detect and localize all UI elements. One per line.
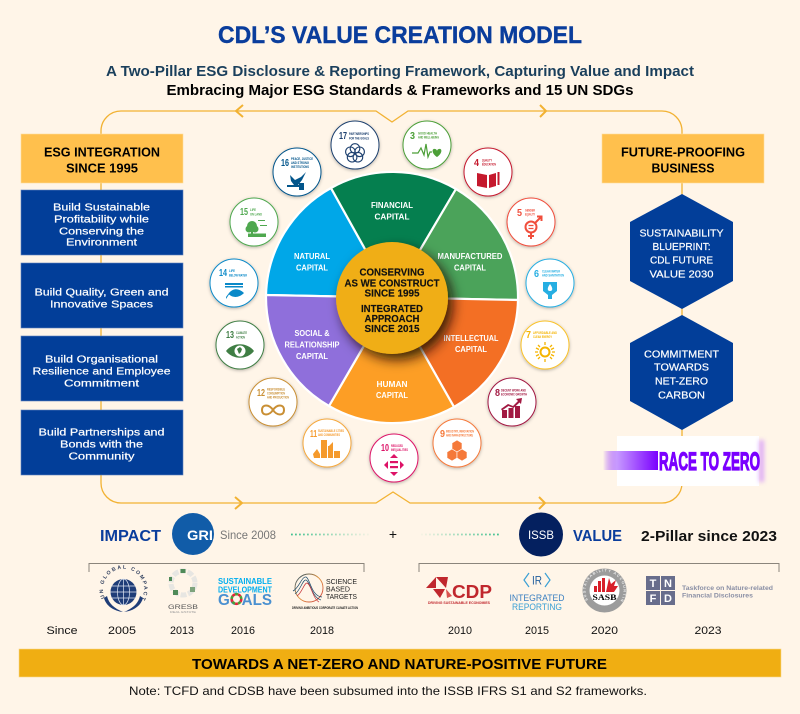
SDG 8: DECENT WORK AND: [501, 388, 526, 392]
box: sustainable profitability: Build Sustainable: [53, 202, 150, 214]
logo: Integrated Reporting: REPORTING: [512, 602, 562, 613]
hexagon: sustainability blueprint: VALUE 2030: [650, 268, 714, 280]
pie labels: CAPITAL: [454, 262, 486, 272]
logo: GRESB: GRESB: [168, 604, 198, 611]
box: sustainable profitability: [21, 190, 183, 255]
logo: Sustainable Development Goals: SUSTAINABLE: [218, 576, 272, 586]
two-pillar label: 2-Pillar since 2023: [641, 529, 777, 545]
logo: Sustainable Development Goals: DEVELOPMENT: [218, 584, 273, 594]
GRI badge: [172, 513, 214, 555]
box: partnerships: Build Partnerships and: [38, 426, 165, 438]
pie labels: FINANCIAL: [371, 200, 413, 210]
adoption years: 2013: [170, 625, 194, 637]
SDG 7: 7: [526, 330, 531, 341]
centre disc: CONSERVING: [360, 268, 425, 278]
pie labels: HUMAN: [376, 379, 408, 389]
plus sign: +: [389, 526, 397, 542]
adoption years: 2018: [310, 625, 334, 637]
SDG 14: [210, 259, 258, 307]
SDG 15: [230, 198, 278, 246]
SDG 15: ON LAND: [250, 212, 262, 216]
SDG 13: [216, 321, 264, 369]
logo: TNFD: D: [664, 593, 672, 605]
SDG 16: AND STRONG: [291, 161, 309, 165]
SDG 12: [249, 378, 297, 426]
centre disc: APPROACH: [364, 314, 420, 325]
SDG 10: REDUCED: [391, 444, 403, 448]
box: organisational resilience: Commitment: [64, 378, 139, 390]
SDG 10: 10: [381, 443, 389, 454]
heading: ESG integration: ESG INTEGRATION: [44, 146, 160, 160]
logo: CDP: DRIVING SUSTAINABLE ECONOMIES: [428, 601, 491, 605]
SDG 17: [331, 121, 379, 169]
SDG 3: [403, 121, 451, 169]
SDG 14: LIFE: [229, 269, 236, 273]
SDG 17: FOR THE GOALS: [349, 136, 370, 140]
adoption years: 2020: [591, 625, 618, 637]
SDG 12: AND PRODUCTION: [267, 396, 289, 400]
pie labels: [284, 200, 502, 400]
box: sustainable profitability: Conserving the: [59, 226, 144, 238]
pie labels: MANUFACTURED: [438, 251, 502, 261]
SDG 3: GOOD HEALTH: [418, 132, 437, 136]
logo: SASB: [582, 568, 626, 612]
hexagon: sustainability blueprint: SUSTAINABILITY: [640, 228, 724, 240]
SDG 15: LIFE: [250, 208, 257, 212]
SDG 9: [433, 419, 481, 467]
pie labels: CAPITAL: [374, 212, 410, 222]
subtitle: A Two-Pillar ESG Disclosure & Reporting Framework, Capturing Value and Impact: [106, 63, 694, 80]
SDG 8: [488, 378, 536, 426]
centre disc: [336, 242, 448, 354]
SDG 3: AND WELL-BEING: [418, 136, 439, 140]
box: organisational resilience: [21, 336, 183, 401]
GRI badge: GRI: [187, 527, 213, 543]
logo: Science Based Targets: [292, 574, 358, 610]
dotted connector right: [421, 534, 500, 536]
SDG 6: [526, 259, 574, 307]
box: quality spaces: [21, 263, 183, 328]
hexagon: net-zero commitment: [630, 315, 733, 430]
logo: Integrated Reporting: [510, 573, 565, 613]
centre disc: INTEGRATED: [361, 304, 423, 315]
SDG 9: 9: [440, 429, 445, 440]
SDG 4: 4: [474, 158, 479, 169]
logo: Sustainable Development Goals: [218, 576, 273, 609]
logo: GRESB: [168, 569, 198, 614]
SDG 11: SUSTAINABLE CITIES: [318, 429, 345, 433]
hexagon: net-zero commitment: CARBON: [658, 390, 705, 402]
SDG 11: AND COMMUNITIES: [318, 433, 340, 437]
logo: CDP: CDP: [452, 582, 492, 602]
SDG 7: AFFORDABLE AND: [533, 331, 557, 335]
panel: ESG integration: [21, 134, 183, 475]
SDG 5: GENDER: [525, 208, 535, 212]
adoption years: 2023: [694, 625, 722, 637]
SDG 7: [521, 321, 569, 369]
heading: ESG integration: [21, 134, 183, 183]
centre disc: AS WE CONSTRUCT: [344, 278, 440, 290]
logo: Sustainable Development Goals: GOALS: [218, 592, 272, 609]
since 2008: Since 2008: [220, 528, 276, 542]
heading: future-proofing: FUTURE-PROOFING: [621, 146, 745, 160]
SDG 17: 17: [339, 131, 347, 142]
logo: Science Based Targets: BASED: [326, 584, 350, 594]
connecting frame with arrows: [101, 105, 682, 509]
pie chart: six capitals: [266, 172, 518, 423]
SDG 8: 8: [495, 388, 500, 399]
logo: GRESB: REAL ESTATE: [170, 610, 196, 614]
impact bracket: [89, 564, 364, 572]
SDG 10: [370, 434, 418, 482]
impact label: IMPACT: [100, 528, 162, 545]
value label: VALUE: [573, 528, 622, 545]
logo: TNFD: T: [650, 578, 657, 590]
adoption years: 2016: [231, 625, 255, 637]
box: organisational resilience: Resilience and Employee: [32, 366, 171, 378]
pie labels: SOCIAL &: [294, 328, 330, 338]
heading: ESG integration: SINCE 1995: [66, 162, 138, 176]
logo: TNFD: F: [650, 593, 657, 605]
adoption years: [46, 625, 722, 637]
box: organisational resilience: Build Organisational: [45, 354, 158, 366]
SDG 16: 16: [281, 158, 289, 169]
adoption years: 2010: [448, 625, 472, 637]
logo: TNFD: Financial Disclosures: [682, 592, 754, 600]
hexagon: sustainability blueprint: BLUEPRINT:: [652, 241, 710, 253]
logo: TNFD: N: [664, 578, 672, 590]
SDG 17: PARTNERSHIPS: [349, 132, 370, 136]
dotted connector left: [291, 534, 370, 536]
pie labels: INTELLECTUAL: [444, 333, 498, 343]
SDG 5: 5: [517, 208, 522, 219]
SDG 14: 14: [219, 268, 227, 279]
adoption years: 2015: [525, 625, 549, 637]
SDG 7: CLEAN ENERGY: [533, 335, 553, 339]
logo: race to zero: [603, 436, 764, 486]
SDG 16: [273, 148, 321, 196]
SDG 16: PEACE, JUSTICE: [291, 157, 314, 161]
ISSB badge: [519, 512, 563, 556]
footnote: Note: TCFD and CDSB have been subsumed into the ISSB IFRS S1 and S2 frameworks.: [129, 684, 647, 698]
SDG 5: [507, 198, 555, 246]
heading: future-proofing: BUSINESS: [652, 162, 714, 176]
SDG 11: [303, 419, 351, 467]
logo: Integrated Reporting: INTEGRATED: [510, 593, 565, 604]
centre disc: SINCE 1995: [364, 288, 420, 300]
SDG 3: 3: [410, 131, 415, 142]
box: sustainable profitability: Environment: [66, 236, 137, 248]
SDG 15: 15: [240, 207, 248, 218]
pie labels: RELATIONSHIP: [284, 340, 340, 350]
SDG 6: 6: [534, 269, 539, 280]
panel: future-proofing business: [602, 134, 764, 486]
hexagon: sustainability blueprint: [630, 194, 733, 309]
box: sustainable profitability: Profitability while: [54, 214, 149, 226]
SDG 8: ECONOMIC GROWTH: [501, 392, 527, 396]
box: quality spaces: Build Quality, Green and: [34, 286, 169, 298]
hexagon: net-zero commitment: NET-ZERO: [655, 376, 708, 388]
SDG 6: CLEAN WATER: [542, 270, 560, 274]
SDG 4: QUALITY: [482, 158, 492, 162]
SDG 4: EDUCATION: [482, 162, 496, 166]
logo: TNFD: Taskforce on Nature-related: [682, 585, 773, 592]
SDG 13: 13: [226, 330, 234, 341]
logo: Science Based Targets: SCIENCE: [326, 577, 357, 586]
SDG 12: 12: [257, 388, 265, 399]
pie labels: CAPITAL: [296, 351, 328, 361]
adoption years: Since: [46, 625, 78, 637]
logo: SASB: SASB: [592, 592, 617, 602]
SDG 6: AND SANITATION: [542, 274, 564, 278]
box: partnerships: Bonds with the: [60, 438, 143, 450]
SDG 14: BELOW WATER: [229, 274, 247, 278]
SDG 12: RESPONSIBLE: [267, 388, 286, 392]
SDG 4: [464, 148, 512, 196]
SDG 13: CLIMATE: [236, 331, 248, 335]
logo: UN Global Compact: UN GLOBAL COMPACT: [99, 565, 148, 601]
banner: [19, 649, 781, 677]
logo: Science Based Targets: DRIVING AMBITIOUS CORPORATE CLIMATE ACTION: [292, 606, 358, 610]
SDG 11: 11: [310, 429, 317, 440]
heading: future-proofing: [602, 134, 764, 183]
centre disc: SINCE 2015: [364, 324, 420, 335]
hexagon: net-zero commitment: COMMITMENT: [644, 348, 720, 360]
SDG 9: INDUSTRY, INNOVATION: [446, 430, 474, 434]
SDG 12: CONSUMPTION: [267, 392, 285, 396]
box: partnerships: [21, 410, 183, 475]
logo: TNFD: [646, 576, 773, 605]
adoption years: 2005: [108, 625, 136, 637]
logo: Science Based Targets: TARGETS: [326, 592, 357, 601]
title: CDL’S VALUE CREATION MODEL: [218, 22, 582, 49]
banner: TOWARDS A NET-ZERO AND NATURE-POSITIVE FUTURE: [192, 656, 607, 673]
SDG 5: EQUALITY: [525, 212, 535, 216]
value bracket: [419, 564, 779, 572]
logo: CDP: [426, 577, 492, 605]
box: partnerships: Community: [68, 450, 135, 462]
pie labels: CAPITAL: [296, 262, 328, 272]
SDG 9: AND INFRASTRUCTURE: [446, 434, 473, 438]
SDG 16: INSTITUTIONS: [291, 165, 310, 169]
SDG 10: INEQUALITIES: [391, 448, 409, 452]
pie labels: CAPITAL: [376, 390, 408, 400]
pie labels: CAPITAL: [455, 344, 487, 354]
logo: Integrated Reporting: IR: [532, 574, 542, 588]
subheading: Embracing Major ESG Standards & Frameworks and 15 UN SDGs: [166, 82, 634, 99]
logo: SASB: SUSTAINABILITY ACCOUNTING: [583, 569, 626, 602]
pie labels: NATURAL: [294, 251, 330, 261]
SDG 13: ACTION: [236, 336, 245, 340]
box: quality spaces: Innovative Spaces: [50, 298, 153, 310]
ISSB badge: ISSB: [528, 528, 554, 542]
hexagon: sustainability blueprint: CDL FUTURE: [650, 254, 713, 266]
hexagon: net-zero commitment: TOWARDS: [654, 362, 709, 374]
